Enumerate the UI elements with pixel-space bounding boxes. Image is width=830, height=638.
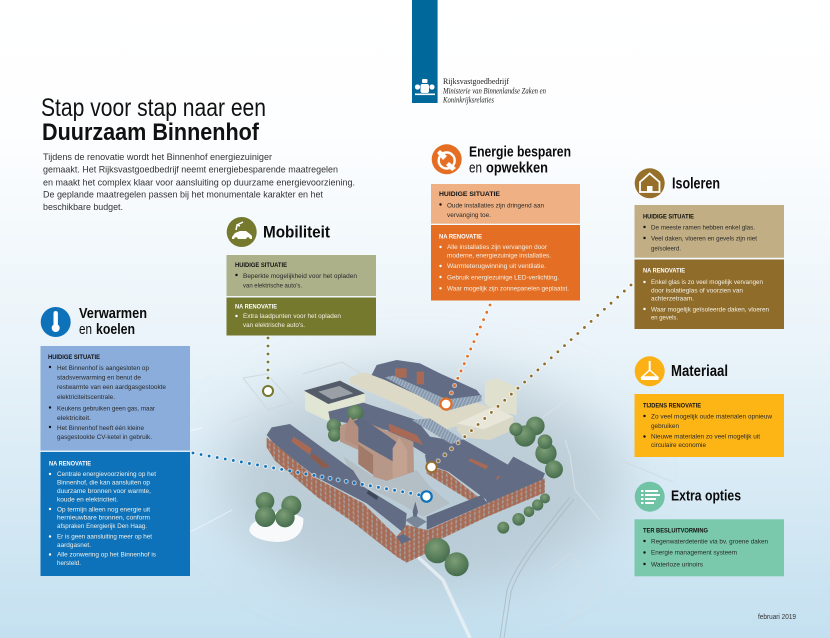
heading: Energie besparen en opwekken: en (469, 160, 482, 177)
current situation: HUIDIGE SITUATIE (235, 262, 287, 269)
icon: plug (432, 144, 462, 174)
after renovation: Op termijn alleen nog energie uit (57, 506, 150, 514)
logo text: Rijksvastgoedbedrijf (443, 76, 509, 86)
right rear wing (425, 439, 545, 507)
current situation: geïsoleerd. (651, 245, 681, 252)
intro text: gemaakt. Het Rijksvastgoedbedrijf neemt energiebesparende maatregelen (43, 165, 338, 175)
current situation (226, 255, 376, 296)
heading: Energie besparen en opwekken: Energie besparen (469, 144, 571, 161)
white block left (304, 381, 365, 421)
during renovation: gebruiken (651, 423, 679, 430)
title (41, 94, 266, 146)
during renovation: TIJDENS RENOVATIE (643, 402, 701, 409)
icon: list (635, 482, 665, 512)
connector: Verwarmen (193, 453, 432, 502)
after renovation: aardgasnet. (57, 542, 91, 549)
panel: Extra opties (634, 482, 784, 576)
current situation: Beperkte mogelijkheid voor het opladen (243, 273, 358, 280)
current situation: Veel daken, vloeren en gevels zijn niet (651, 236, 757, 243)
after renovation: duurzame bronnen voor warmte, (57, 488, 151, 495)
current situation: De meeste ramen hebben enkel glas. (651, 224, 755, 231)
logo text: Ministerie van Binnenlandse Zaken en (442, 86, 546, 96)
white tower and rotunda (457, 378, 517, 440)
heading: Verwarmen en koelen (79, 305, 147, 338)
after renovation: hersteld. (57, 560, 81, 567)
left wing facade (267, 437, 397, 557)
intro text: De geplande maatregelen passen bij het monumentale karakter en het (43, 190, 323, 200)
during renovation: circulaire economie (651, 442, 707, 449)
panel: Isoleren (634, 168, 784, 329)
for decision making: Energie management systeem (651, 550, 737, 557)
3D illustration of the Binnenhof (249, 360, 563, 576)
after renovation: Extra laadpunten voor het opladen (243, 313, 341, 320)
after renovation: NA RENOVATIE (439, 234, 482, 241)
after renovation: koude en elektriciteit. (57, 496, 118, 504)
during renovation: Nieuwe materialen zo veel mogelijk uit (651, 434, 760, 441)
current situation: van elektrische auto's. (243, 282, 302, 290)
logo text (442, 76, 546, 105)
after renovation: NA RENOVATIE (49, 461, 91, 468)
logo text: Koninkrijksrelaties (442, 95, 495, 105)
after renovation (226, 298, 376, 336)
after renovation: Centrale energievoorziening op het (57, 471, 156, 478)
icon: electric car (227, 217, 257, 247)
after renovation: Waar mogelijk zijn zonnepanelen geplaatst. (447, 285, 569, 292)
current situation: Keukens gebruiken geen gas, maar (57, 406, 155, 413)
after renovation: Waar mogelijk geïsoleerde daken, vloeren (651, 306, 769, 313)
heading: Energie besparen en opwekken (469, 144, 571, 177)
far beige building (350, 360, 490, 429)
icon: crane hook with material (635, 356, 665, 386)
connector: Energie (440, 305, 490, 410)
connector: Isoleren (426, 285, 631, 472)
current situation (40, 346, 190, 450)
after renovation: Enkel glas is zo veel mogelijk vervangen (651, 279, 763, 286)
heading: Verwarmen en koelen: Verwarmen (79, 305, 147, 322)
current situation (431, 184, 580, 224)
title: Stap voor stap naar een (41, 94, 266, 122)
icon: house (635, 168, 665, 198)
logo bar (412, 0, 438, 103)
after renovation: Er is geen aansluiting meer op het (57, 534, 152, 541)
after renovation (40, 452, 190, 576)
panel: Verwarmen en koelen (40, 305, 190, 576)
trees right (425, 417, 563, 576)
current situation: HUIDIGE SITUATIE (439, 191, 500, 198)
heading: Verwarmen en koelen: koelen (96, 321, 135, 338)
map outlines (120, 362, 673, 638)
current situation (634, 205, 784, 258)
for decision making: Regenwaterdetentie via bv. groene daken (651, 538, 768, 545)
heading: Energie besparen en opwekken: opwekken (486, 160, 548, 177)
tree island (249, 492, 303, 542)
Ridderzaal (340, 417, 414, 481)
during renovation (634, 394, 784, 457)
after renovation: van elektrische auto's. (243, 322, 305, 329)
after renovation: NA RENOVATIE (235, 304, 277, 311)
icon: coat of arms (415, 79, 435, 95)
icon: thermometer (41, 307, 71, 337)
heading: Materiaal: Materiaal (671, 363, 728, 380)
connector: Mobiliteit (263, 338, 273, 396)
current situation: vervanging toe. (447, 212, 491, 219)
after renovation: en gevels. (651, 315, 678, 322)
after renovation: Alle installaties zijn vervangen door (447, 244, 547, 251)
for decision making: Waterloze urinoirs (651, 562, 703, 569)
current situation: restwarmte van een aardgasgestookte (57, 384, 167, 391)
heading: Verwarmen en koelen: en (79, 321, 92, 338)
heading: Mobiliteit: Mobiliteit (263, 222, 330, 242)
panel: Energie besparen en opwekken (431, 144, 580, 300)
current situation: Het Binnenhof is aangesloten op (57, 365, 149, 372)
panel: Materiaal (634, 356, 784, 457)
after renovation: Gebruik energiezuinige LED-verlichting. (447, 274, 559, 281)
corner block (397, 502, 427, 563)
after renovation: Warmteterugwinning uit ventilatie. (447, 263, 546, 270)
heading: Isoleren: Isoleren (672, 176, 720, 193)
current situation: elektriciteit. (57, 415, 91, 422)
heading: Extra opties: Extra opties (671, 488, 741, 505)
after renovation: hernieuwbare bronnen, conform (57, 515, 150, 522)
after renovation: afspraken Energierijk Den Haag. (57, 523, 147, 530)
title: Duurzaam Binnenhof (42, 119, 260, 146)
date: februari 2019 (758, 614, 796, 621)
courtyard (343, 457, 450, 517)
middle section (328, 403, 470, 455)
current situation: HUIDIGE SITUATIE (48, 354, 100, 361)
for decision making: TER BESLUITVORMING (643, 528, 708, 535)
right wing (427, 478, 545, 546)
trees behind (327, 405, 364, 442)
current situation: Oude installaties zijn dringend aan (447, 202, 545, 210)
after renovation: Alle zonwering op het Binnenhof is (57, 552, 156, 559)
ground shadow around the complex (220, 370, 620, 590)
current situation: gasgestookte CV-ketel in gebruik. (57, 434, 152, 441)
after renovation: Binnenhof, die kan aansluiten op (57, 480, 150, 486)
intro text (43, 152, 355, 212)
after renovation (431, 225, 580, 300)
current situation: stadsverwarming en benut de (57, 374, 142, 382)
left wing roof (267, 424, 407, 534)
after renovation: achterzetraam. (651, 296, 694, 303)
current situation: Het Binnenhof heeft één kleine (57, 425, 144, 432)
intro text: beschikbare budget. (43, 202, 123, 212)
after renovation: NA RENOVATIE (643, 268, 685, 275)
after renovation: moderne, energiezuinige installaties. (447, 253, 551, 260)
current situation: HUIDIGE SITUATIE (643, 214, 694, 221)
after renovation: door isolatieglas of voorzien van (651, 288, 743, 295)
intro text: Tijdens de renovatie wordt het Binnenhof energiezuiniger (43, 152, 272, 162)
panel: Mobiliteit (226, 217, 376, 336)
after renovation (634, 260, 784, 329)
intro text: en maakt het complex klaar voor aansluiting op duurzame energievoorziening. (43, 177, 355, 187)
current situation: elektriciteitscentrale. (57, 394, 115, 401)
during renovation: Zo veel mogelijk oude materialen opnieuw (651, 413, 772, 420)
for decision making (634, 519, 784, 576)
